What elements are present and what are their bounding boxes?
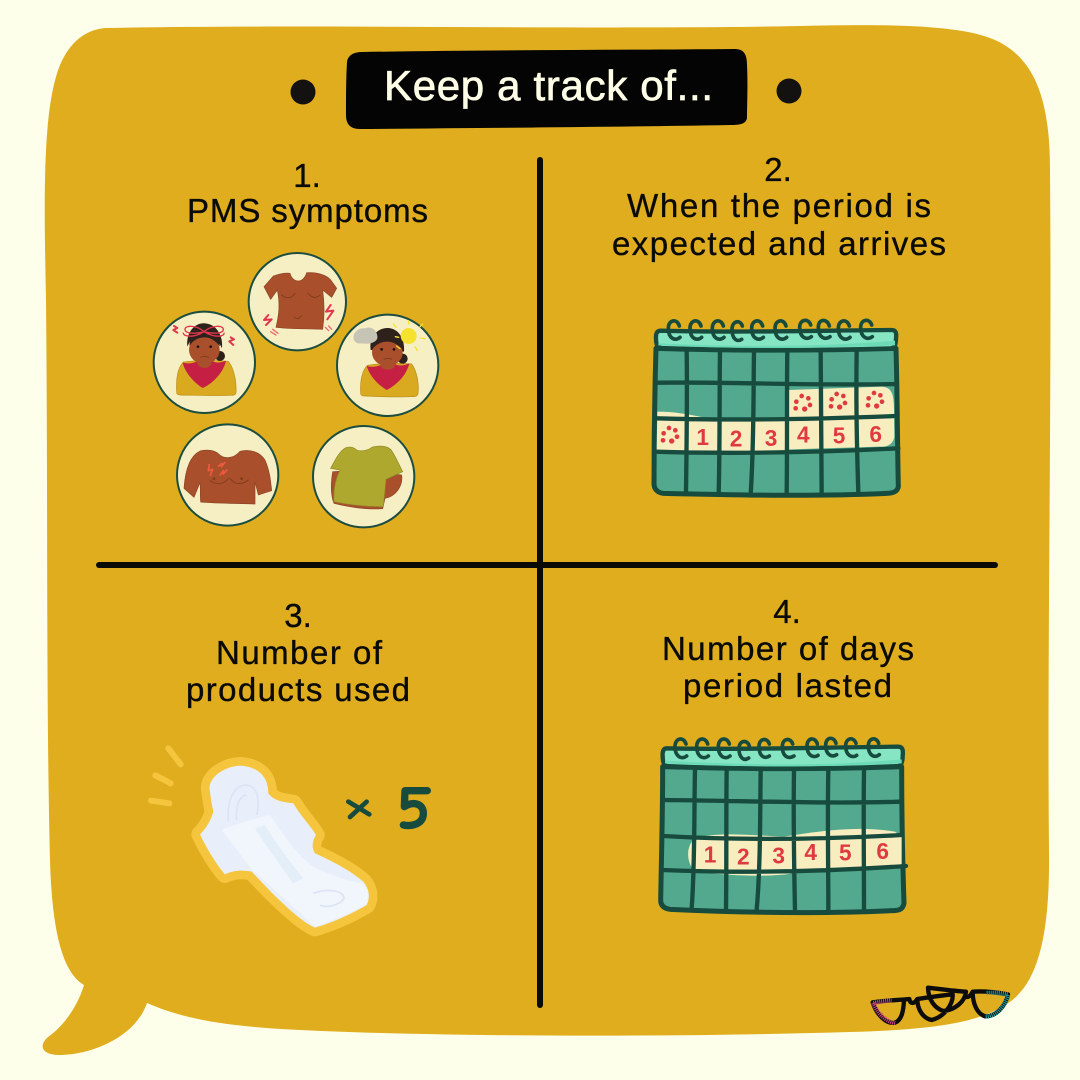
predicted spots	[661, 391, 884, 444]
panel 4 heading: 4.	[773, 593, 801, 630]
panel 3 heading: products used	[186, 671, 410, 708]
panel 2 heading: 2.	[764, 151, 792, 188]
panel 3 heading: 3.	[284, 597, 312, 634]
period day numbers: 4	[804, 839, 817, 865]
period day numbers: 1	[696, 424, 709, 450]
panel 2: expected and actual period	[612, 151, 946, 495]
panel 3 heading: Number of	[216, 634, 383, 671]
period day numbers: 6	[869, 421, 882, 447]
title text: Keep a track of...	[384, 62, 713, 109]
shine marks	[151, 748, 181, 803]
panel 4: days period lasted	[661, 593, 914, 913]
calendar: six period days	[661, 738, 906, 913]
calendar: predicted and actual days	[654, 320, 898, 495]
expected days highlight	[657, 387, 894, 453]
period day numbers: 2	[730, 426, 742, 452]
period day numbers	[704, 838, 889, 869]
horizontal divider	[99, 561, 995, 568]
period days highlight	[688, 829, 902, 876]
panel 1 heading	[187, 157, 428, 229]
period day numbers: 1	[704, 842, 716, 868]
icon: breast tenderness torso	[177, 424, 278, 526]
period day numbers: 3	[765, 425, 777, 451]
title banner	[346, 49, 747, 129]
pad	[200, 766, 369, 928]
panel 3 heading	[186, 597, 410, 708]
panel 1 heading: 1.	[293, 157, 321, 194]
panel 1: PMS symptoms	[154, 157, 438, 527]
vertical divider	[537, 160, 543, 1005]
panel 4 heading	[662, 593, 914, 704]
period day numbers: 2	[737, 843, 750, 869]
period day numbers: 4	[797, 421, 810, 447]
panel 2 heading: When the period is	[627, 187, 931, 224]
panel 2 heading: expected and arrives	[612, 225, 946, 262]
panel 4 heading: period lasted	[683, 667, 892, 704]
icon: headache woman	[154, 312, 255, 413]
icon: bloating t-shirt	[313, 426, 414, 527]
period day numbers: 6	[876, 838, 889, 864]
title	[346, 49, 747, 129]
period day numbers: 5	[833, 422, 845, 448]
times five label	[348, 791, 427, 825]
calendar rings	[668, 320, 872, 340]
period day numbers	[696, 421, 882, 452]
panel 1 heading: PMS symptoms	[187, 192, 428, 229]
calendar rings	[675, 738, 879, 759]
symptom icons	[154, 253, 438, 527]
period day numbers: 5	[839, 840, 852, 866]
icon: mood swings woman	[337, 315, 438, 416]
panel 2 heading	[612, 151, 946, 262]
left title dot	[290, 80, 316, 104]
icon: bloated torso with cramps	[249, 253, 346, 350]
period day numbers: 3	[772, 843, 785, 869]
logo: overlapping glasses	[873, 988, 1008, 1023]
panel 3: products used	[151, 597, 427, 928]
right title dot	[776, 78, 802, 104]
panel 4 heading: Number of days	[662, 630, 914, 667]
icon: sanitary pad times five	[151, 748, 427, 928]
